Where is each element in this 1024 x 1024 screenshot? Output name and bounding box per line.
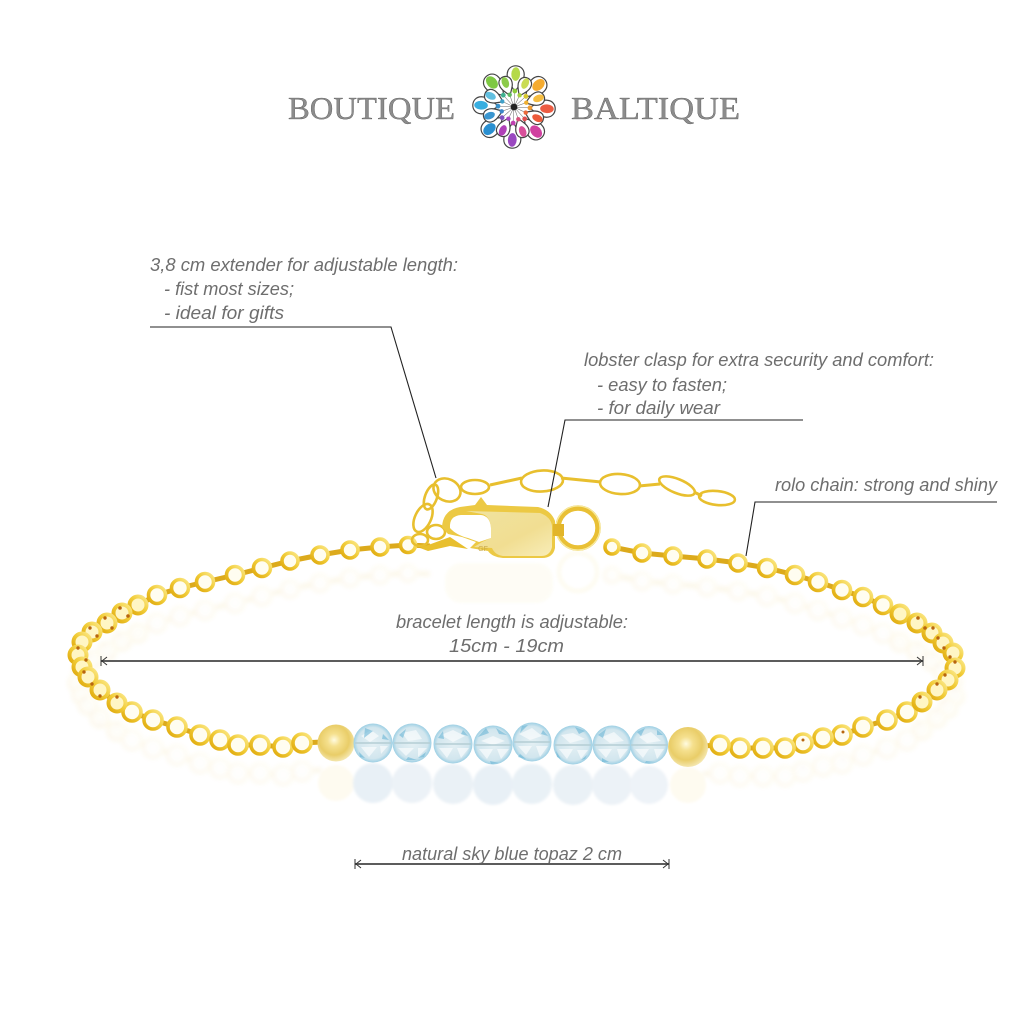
right chain rings [605,540,916,757]
brand name right: BALTIQUE [571,90,740,126]
right chain end rings [892,606,964,710]
callout: rolo chain [746,474,999,556]
gold bead right [668,727,708,767]
callout: lobster clasp: lobster clasp for extra security and comfort: [584,349,934,370]
chain reflection [70,566,964,785]
gold bead left [318,724,354,762]
icon: flower logo [472,65,556,149]
lobster clasp [442,497,600,558]
rolo chain [70,538,964,757]
left chain rings [123,538,416,756]
stamp GF: GF [478,546,488,553]
topaz beads [354,722,668,764]
chain link bars [78,545,955,748]
dimension: topaz length: natural sky blue topaz 2 cm [402,843,622,864]
callout: extender [150,254,458,478]
dimension: bracelet length: 15cm - 19cm [449,635,564,656]
chain dark shadow specks [76,606,957,742]
gem reflections [318,763,706,805]
logo [288,65,740,149]
dimension: bracelet length [101,611,923,666]
brand name left: BOUTIQUE [288,90,455,126]
callout: lobster clasp: - for daily wear [597,397,721,418]
dimension: topaz length [355,843,669,869]
callout: extender: 3,8 cm extender for adjustable length: [150,254,458,275]
clasp reflection [445,553,597,603]
callout: rolo chain: rolo chain: strong and shiny [775,474,999,495]
dimension: bracelet length: bracelet length is adjustable: [396,611,628,632]
left chain end rings [70,596,146,712]
callout: extender: - ideal for gifts [164,302,284,323]
extender chain [409,469,736,551]
callout: extender: - fist most sizes; [164,278,294,299]
callout: lobster clasp [548,349,934,507]
clasp jump ring [558,508,598,548]
callout: lobster clasp: - easy to fasten; [597,374,727,395]
